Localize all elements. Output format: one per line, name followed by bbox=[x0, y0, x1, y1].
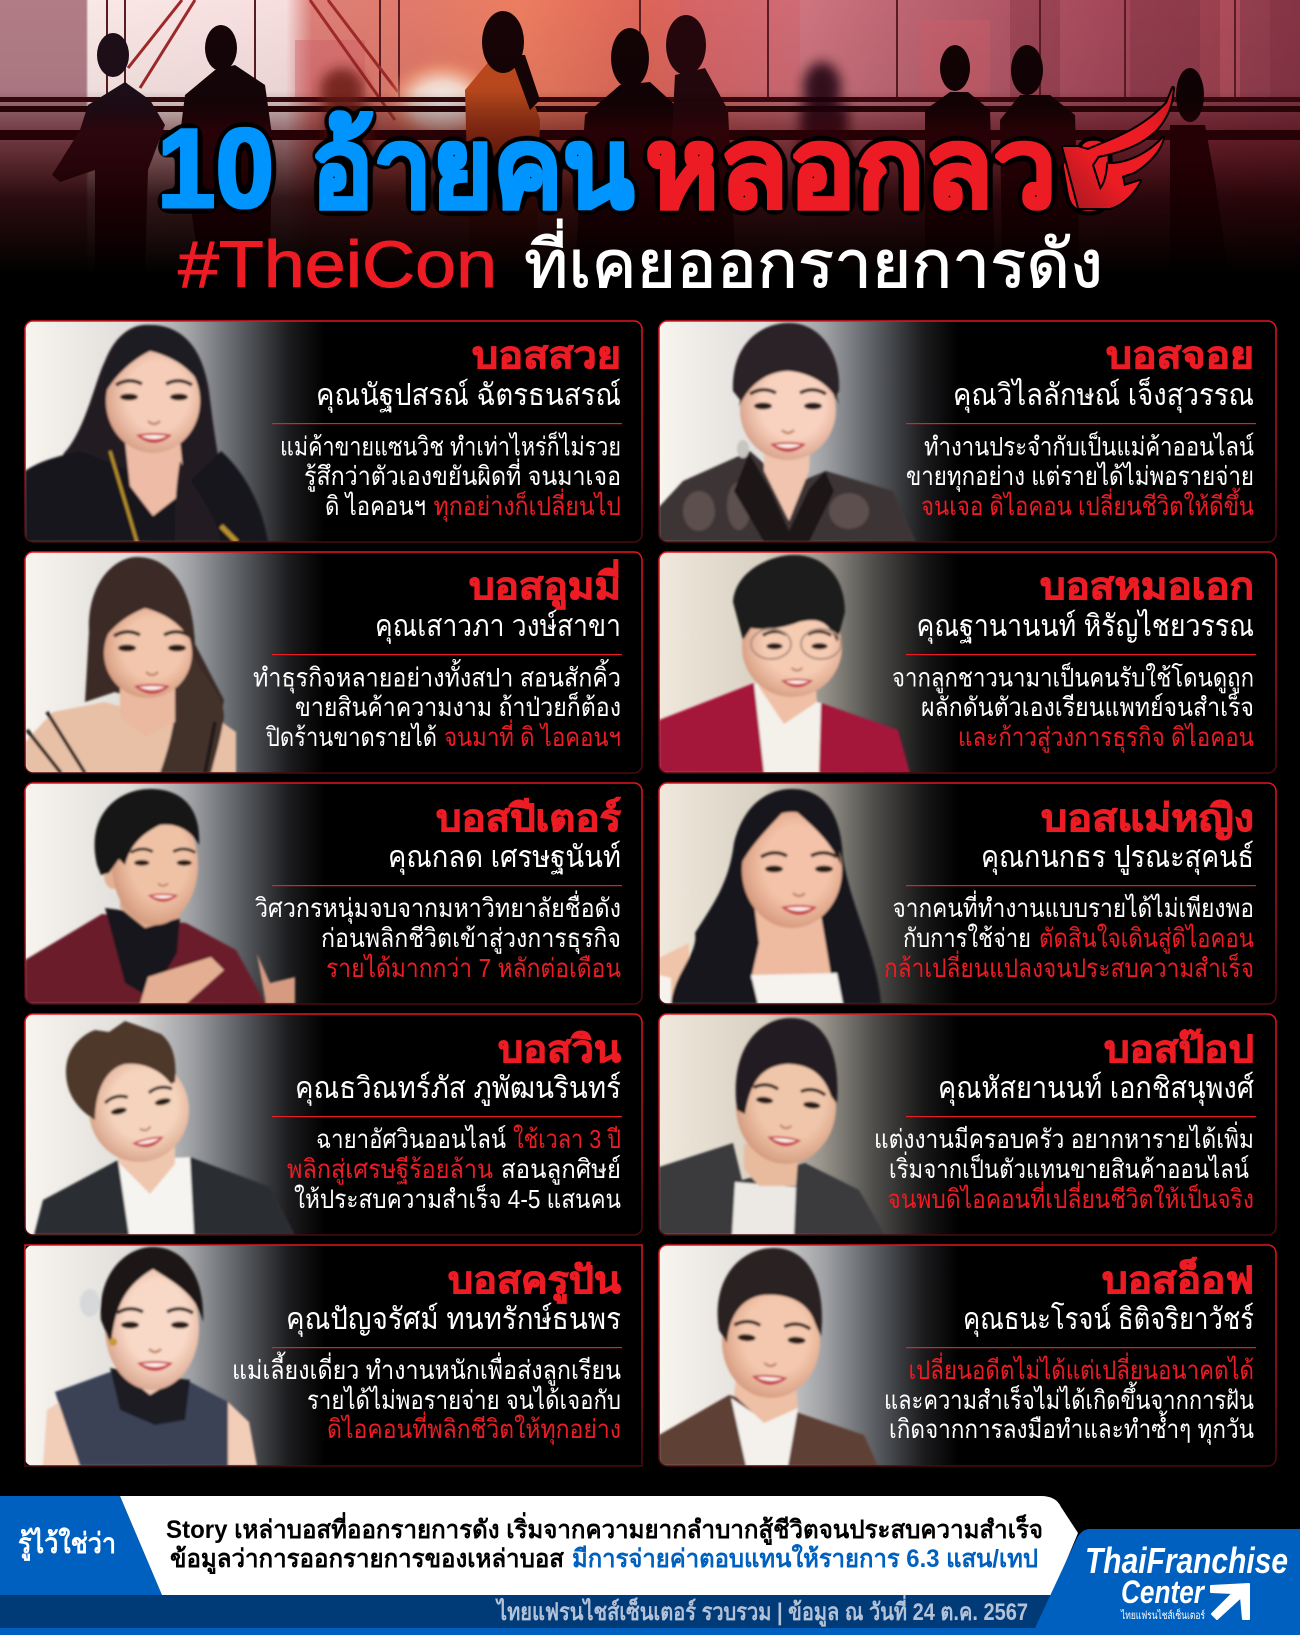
title: main heading: หลอกลว bbox=[645, 106, 1057, 231]
logo: ThaiFranchise Center: ไทยแฟรนไชส์เซ็นเตอร์ bbox=[1120, 1608, 1205, 1622]
name: คุณปัญจรัศม์ ทนทรักษ์ธนพร bbox=[286, 1302, 621, 1338]
description bbox=[884, 890, 1254, 983]
description: เกิดจากการลงมือทำและทำซ้ำๆ ทุกวัน bbox=[889, 1410, 1254, 1445]
panel: บอสหมอเอก bbox=[659, 552, 1276, 773]
card border bbox=[25, 1014, 642, 1235]
subtitle: ที่เคยออกรายการดัง bbox=[524, 219, 1103, 301]
description: ฉายาอัศวินออนไลน์ bbox=[316, 1124, 506, 1154]
description: แม่ค้าขายแซนวิช ทำเท่าไหร่ก็ไม่รวย bbox=[280, 430, 621, 462]
name: คุณธนะโรจน์ ธิติจริยาวัชร์ bbox=[963, 1301, 1254, 1338]
description: แต่งงานมีครอบครัว อยากหารายได้เพิ่ม bbox=[874, 1121, 1254, 1154]
description bbox=[874, 1121, 1254, 1214]
card border bbox=[25, 1245, 642, 1466]
divider bbox=[906, 654, 1256, 655]
description: กับการใช้จ่าย bbox=[903, 923, 1031, 953]
description: กล้าเปลี่ยนแปลงจนประสบความสำเร็จ bbox=[884, 950, 1254, 983]
heading: บอสหมอเอก bbox=[1040, 566, 1254, 608]
portrait: บอสอ็อฟ bbox=[659, 1245, 959, 1466]
card border bbox=[25, 321, 642, 542]
portrait: บอสแม่หญิง bbox=[659, 783, 959, 1004]
icon: wing on title bbox=[1063, 88, 1173, 208]
description bbox=[255, 890, 621, 983]
description bbox=[892, 662, 1254, 753]
panel: บอสปีเตอร์ bbox=[25, 783, 642, 1004]
card border bbox=[659, 1014, 1276, 1235]
card border bbox=[659, 1245, 1276, 1466]
logo: ThaiFranchise Center: Center bbox=[1121, 1574, 1205, 1610]
description: จนพบดิไอคอนที่เปลี่ยนชีวิตให้เป็นจริง bbox=[888, 1181, 1254, 1214]
portrait: บอสปีเตอร์ bbox=[25, 783, 325, 1004]
portrait: บอสป๊อป bbox=[659, 1014, 959, 1235]
divider bbox=[272, 423, 622, 424]
description: ดิไอคอนที่พลิกชีวิตให้ทุกอย่าง bbox=[327, 1411, 621, 1445]
panel: บอสครูปัน bbox=[25, 1245, 642, 1466]
heading: บอสป๊อป bbox=[1104, 1029, 1254, 1071]
white callout bbox=[120, 1496, 1078, 1595]
description: ทำธุรกิจหลายอย่างทั้งสปา สอนสักคิ้ว bbox=[253, 658, 621, 694]
heading: บอสอ็อฟ bbox=[1102, 1257, 1254, 1302]
logo: ThaiFranchise Center bbox=[1015, 1529, 1300, 1635]
portrait: บอสสวย bbox=[25, 321, 325, 542]
divider bbox=[906, 885, 1256, 886]
heading: บอสครูปัน bbox=[448, 1260, 621, 1304]
card border bbox=[659, 321, 1276, 542]
hero photo: silhouettes of businessmen bbox=[0, 0, 1300, 275]
name: คุณนัฐปสรณ์ ฉัตรธนสรณ์ bbox=[316, 378, 621, 414]
name: คุณวิไลลักษณ์ เจ็งสุวรรณ bbox=[953, 376, 1254, 414]
panel: บอสอูมมี่ bbox=[25, 552, 642, 773]
description bbox=[280, 430, 621, 522]
description: ก่อนพลิกชีวิตเข้าสู่วงการธุรกิจ bbox=[321, 923, 621, 954]
card border bbox=[25, 552, 642, 773]
label text: รู้ไว้ใช่ว่า bbox=[18, 1527, 116, 1561]
divider bbox=[906, 423, 1256, 424]
divider bbox=[272, 885, 622, 886]
description: จากคนที่ทำงานแบบรายได้ไม่เพียงพอ bbox=[892, 890, 1254, 923]
description: รายได้ไม่พอรายจ่าย จนได้เจอกับ bbox=[307, 1385, 621, 1415]
subtitle bbox=[178, 219, 1103, 301]
description bbox=[287, 1124, 621, 1214]
description: รายได้มากกว่า 7 หลักต่อเดือน bbox=[326, 953, 621, 983]
description: และก้าวสู่วงการธุรกิจ ดิไอคอน bbox=[958, 722, 1254, 753]
panel: บอสแม่หญิง bbox=[659, 783, 1276, 1004]
card border bbox=[25, 783, 642, 1004]
divider bbox=[272, 654, 622, 655]
icon: arrow bbox=[1211, 1584, 1249, 1619]
description: สอนลูกศิษย์ bbox=[501, 1154, 621, 1185]
divider bbox=[272, 1116, 622, 1117]
name: คุณกนกธร ปูรณะสุคนธ์ bbox=[981, 840, 1254, 876]
description: พลิกสู่เศรษฐีร้อยล้าน bbox=[287, 1154, 493, 1185]
heading: บอสแม่หญิง bbox=[1041, 798, 1254, 840]
callout text: Story เหล่าบอสที่ออกรายการดัง เริ่มจากความยากลำบากสู้ชีวิตจนประสบความสำเร็จ bbox=[166, 1512, 1043, 1546]
footer banner: รู้ไว้ใช่ว่า bbox=[0, 1496, 1300, 1635]
callout text bbox=[166, 1512, 1043, 1575]
description: แม่เลี้ยงเดี่ยว ทำงานหนักเพื่อส่งลูกเรียน bbox=[232, 1351, 621, 1386]
portrait: บอสจอย bbox=[659, 321, 959, 542]
name: คุณหัสยานนท์ เอกชิสนุพงศ์ bbox=[938, 1071, 1254, 1107]
subtitle: #TheiCon bbox=[178, 227, 497, 301]
description: ผลักดันตัวเองเรียนแพทย์จนสำเร็จ bbox=[921, 691, 1254, 722]
title: main heading: อ้ายคน bbox=[311, 106, 634, 231]
description: ดิ ไอคอนฯ bbox=[325, 491, 426, 521]
card border bbox=[659, 552, 1276, 773]
heading: บอสวิน bbox=[498, 1029, 621, 1071]
heading: บอสปีเตอร์ bbox=[436, 797, 622, 840]
name: คุณธวิณทร์ภัส ภูพัฒนรินทร์ bbox=[295, 1071, 621, 1107]
description: วิศวกรหนุ่มจบจากมหาวิทยาลัยชื่อดัง bbox=[255, 890, 621, 924]
divider bbox=[906, 1116, 1256, 1117]
blue bottom strip bbox=[0, 1628, 1300, 1635]
description bbox=[253, 658, 621, 752]
title: main heading bbox=[157, 106, 1112, 231]
portrait: บอสหมอเอก bbox=[659, 552, 959, 773]
description: ขายทุกอย่าง แต่รายได้ไม่พอรายจ่าย bbox=[906, 461, 1254, 492]
description: ปิดร้านขาดรายได้ bbox=[265, 722, 437, 752]
navy source bar bbox=[0, 1595, 1052, 1628]
panel: บอสสวย bbox=[25, 321, 642, 542]
panel: บอสวิน bbox=[25, 1014, 642, 1235]
name: คุณเสาวภา วงษ์สาขา bbox=[375, 609, 621, 645]
description: ทุกอย่างก็เปลี่ยนไป bbox=[434, 488, 621, 522]
source text: ไทยแฟรนไชส์เซ็นเตอร์ รวบรวม | ข้อมูล ณ วันที่ 24 ต.ค. 2567 bbox=[494, 1594, 1028, 1627]
description: รู้สึกว่าตัวเองขยันผิดที่ จนมาเจอ bbox=[304, 458, 621, 492]
title: main heading: ง bbox=[1060, 106, 1112, 231]
description: ให้ประสบความสำเร็จ 4-5 แสนคน bbox=[294, 1183, 621, 1214]
description bbox=[884, 1352, 1254, 1445]
heading: บอสอูมมี่ bbox=[469, 559, 621, 610]
description: เริ่มจากเป็นตัวแทนขายสินค้าออนไลน์ bbox=[889, 1151, 1249, 1184]
description: จนเจอ ดิไอคอน เปลี่ยนชีวิตให้ดีขึ้น bbox=[921, 487, 1254, 521]
heading: บอสสวย bbox=[472, 335, 621, 377]
description: จนมาที่ ดิ ไอคอนฯ bbox=[444, 719, 621, 752]
panel: บอสจอย bbox=[659, 321, 1276, 542]
portrait: บอสอูมมี่ bbox=[25, 552, 325, 773]
description bbox=[906, 430, 1254, 521]
description: ตัดสินใจเดินสู่ดิไอคอน bbox=[1039, 923, 1254, 954]
description: ใช้เวลา 3 ปี bbox=[513, 1124, 621, 1154]
panel: บอสอ็อฟ bbox=[659, 1245, 1276, 1466]
description: ขายสินค้าความงาม ถ้าป่วยก็ต้อง bbox=[295, 691, 621, 722]
card border bbox=[659, 783, 1276, 1004]
portrait: บอสครูปัน bbox=[25, 1245, 325, 1466]
divider bbox=[906, 1347, 1256, 1348]
portrait: บอสวิน bbox=[25, 1014, 325, 1235]
panel: บอสป๊อป bbox=[659, 1014, 1276, 1235]
title: main heading: 10 bbox=[157, 106, 274, 231]
name: คุณกลด เศรษฐนันท์ bbox=[388, 840, 621, 876]
blue label tab bbox=[0, 1496, 162, 1595]
callout text: มีการจ่ายค่าตอบแทนให้รายการ 6.3 แสน/เทป bbox=[572, 1543, 1038, 1573]
name: คุณฐานานนท์ หิรัญไชยวรรณ bbox=[916, 608, 1254, 645]
heading: บอสจอย bbox=[1106, 335, 1254, 377]
callout text: ข้อมูลว่าการออกรายการของเหล่าบอส bbox=[170, 1545, 565, 1575]
description bbox=[232, 1351, 621, 1445]
divider bbox=[272, 1347, 622, 1348]
